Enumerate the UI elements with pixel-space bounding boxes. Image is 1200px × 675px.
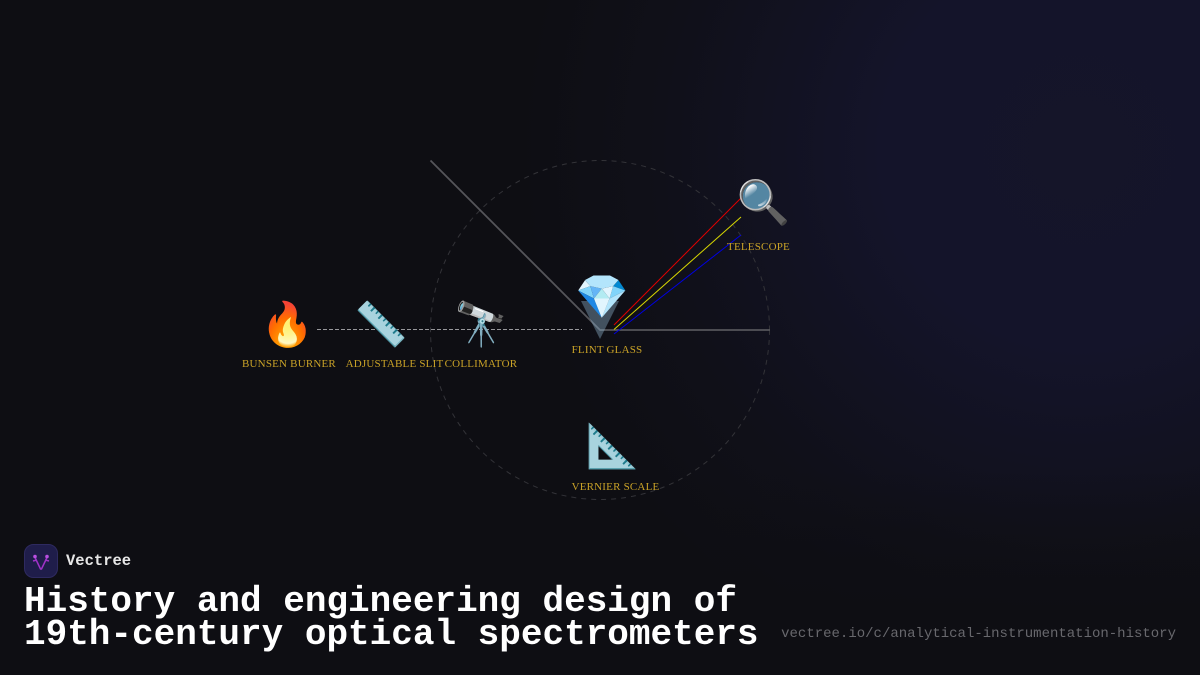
icon: flint glass: 💎	[575, 272, 629, 322]
red ray	[614, 198, 741, 325]
label: adjustable slit: ADJUSTABLE SLIT	[346, 358, 443, 370]
flint glass prism	[581, 301, 619, 339]
title: History and engineering design of	[24, 581, 737, 622]
label: telescope: TELESCOPE	[727, 241, 790, 253]
brand name: Vectree	[66, 552, 131, 570]
incident light beam	[317, 328, 582, 330]
vernier circle	[430, 160, 770, 500]
label: vernier scale: VERNIER SCALE	[572, 481, 660, 493]
label: bunsen burner: BUNSEN BURNER	[242, 358, 336, 370]
icon: telescope: 🔍	[737, 175, 790, 228]
logo icon	[24, 544, 58, 578]
label: collimator: COLLIMATOR	[445, 358, 518, 370]
label: flint glass: FLINT GLASS	[572, 344, 642, 356]
yellow ray	[614, 217, 741, 330]
title	[24, 581, 759, 655]
title: 19th-century optical spectrometers	[24, 614, 759, 655]
icon: adjustable slit: 📏	[354, 300, 408, 350]
icon: collimator: 🔭	[454, 300, 508, 350]
source url: vectree.io/c/analytical-instrumentation-history	[781, 626, 1176, 642]
icon: bunsen burner: 🔥	[261, 300, 314, 350]
icon: vernier scale: 📐	[586, 422, 639, 472]
blue ray	[614, 235, 741, 334]
angle arm	[430, 160, 770, 330]
